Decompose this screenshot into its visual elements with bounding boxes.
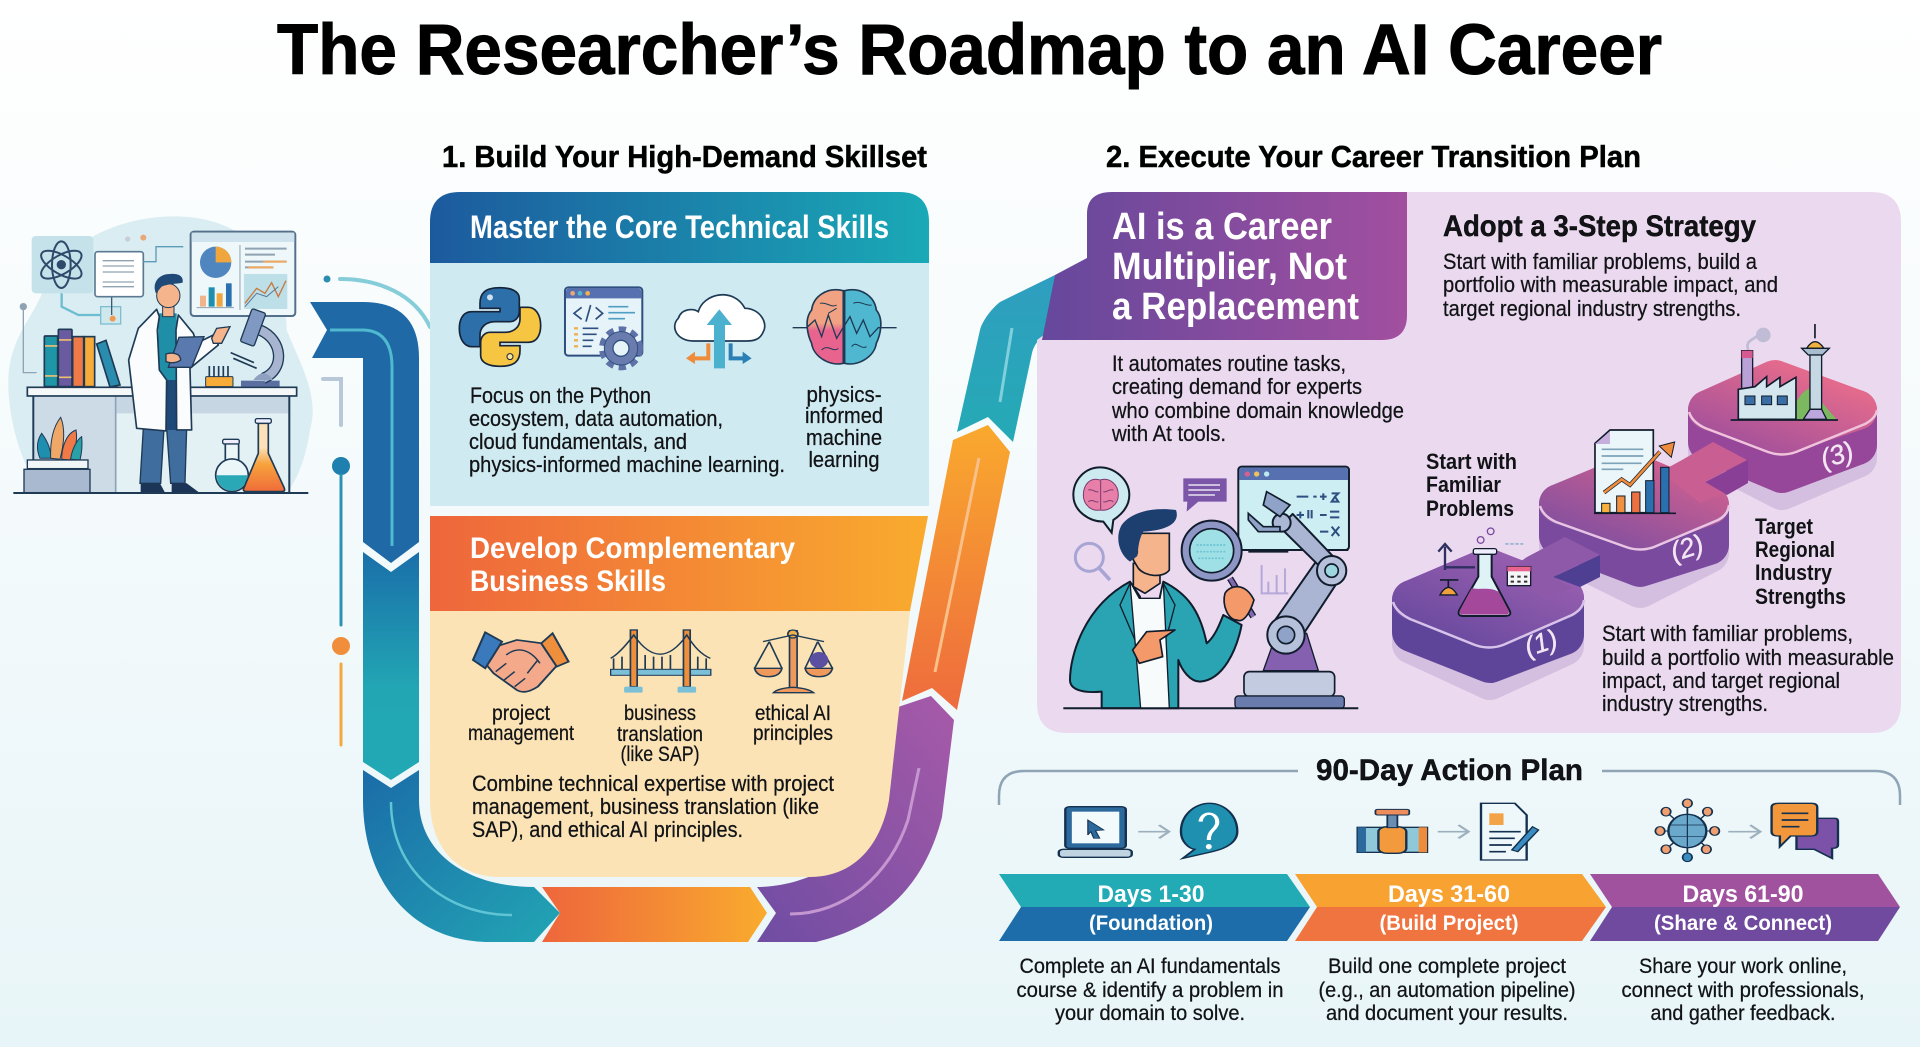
body text: cloud fundamentals, and bbox=[469, 429, 687, 454]
phase: days 31-60: Days 31-60 bbox=[1388, 881, 1510, 908]
body text: management, business translation (like bbox=[472, 794, 819, 819]
illustration: expert with magnifier and robot arm bbox=[1063, 467, 1358, 708]
connector 2 to 3 bbox=[1660, 442, 1748, 503]
phase text: share and connect: connect with professionals, bbox=[1622, 979, 1864, 1002]
heading: section 1: 1. Build Your High-Demand Skillset bbox=[442, 139, 927, 174]
title: The Researcher’s Roadmap to an AI Career bbox=[277, 11, 1662, 90]
side label: physics- bbox=[806, 382, 882, 407]
body text: Focus on the Python bbox=[470, 383, 651, 408]
icon labels: project bbox=[492, 702, 550, 725]
body text bbox=[469, 383, 785, 477]
multiplier text bbox=[1111, 351, 1404, 446]
label: start with familiar problems: Start with bbox=[1426, 449, 1517, 474]
icons on platforms bbox=[1438, 324, 1838, 616]
icon labels: management bbox=[468, 722, 574, 745]
label: target regional industry strengths: Strengths bbox=[1755, 584, 1846, 609]
phase text: share and connect: and gather feedback. bbox=[1650, 1002, 1836, 1025]
platform 3 bbox=[1689, 380, 1877, 474]
bottom strategy text: impact, and target regional bbox=[1602, 668, 1840, 693]
phase: days 31-60 bbox=[1295, 874, 1606, 941]
phase: days 1-30: Days 1-30 bbox=[1098, 881, 1204, 908]
phase: days 1-30: (Foundation) bbox=[1089, 912, 1213, 935]
phase: days 1-30 bbox=[999, 874, 1310, 941]
strategy text bbox=[1443, 249, 1778, 321]
platform 2: (2) bbox=[1667, 529, 1707, 567]
section: 90-day action plan bbox=[999, 754, 1900, 1025]
label: start with familiar problems: Problems bbox=[1426, 496, 1514, 521]
phase text: build project: Build one complete project bbox=[1328, 955, 1566, 978]
bottom strategy text: industry strengths. bbox=[1602, 691, 1768, 716]
ribbon arrow: left and bottom path bbox=[310, 302, 954, 942]
phase text: foundation: your domain to solve. bbox=[1055, 1002, 1245, 1025]
icon labels: principles bbox=[753, 722, 833, 745]
header text bbox=[470, 532, 795, 598]
multiplier text: It automates routine tasks, bbox=[1112, 351, 1346, 376]
phase: days 61-90: Days 61-90 bbox=[1682, 881, 1804, 908]
strategy text: portfolio with measurable impact, and bbox=[1443, 272, 1778, 297]
icon labels: (like SAP) bbox=[620, 743, 700, 766]
panel: complementary business skills bbox=[430, 516, 928, 877]
panel header bbox=[430, 516, 928, 611]
side label: machine bbox=[806, 425, 882, 450]
phase text: share and connect: Share your work online, bbox=[1639, 955, 1847, 978]
header text: Business Skills bbox=[470, 565, 666, 598]
body text: SAP), and ethical AI principles. bbox=[472, 817, 743, 842]
illustration: researcher at lab desk bbox=[8, 216, 313, 493]
strategy text: Start with familiar problems, build a bbox=[1443, 249, 1758, 274]
bottom strategy text bbox=[1602, 621, 1894, 716]
label: start with familiar problems: Familiar bbox=[1426, 472, 1501, 497]
banner text: AI is a Career bbox=[1112, 206, 1332, 248]
label: start with familiar problems bbox=[1426, 449, 1517, 521]
body text: ecosystem, data automation, bbox=[469, 406, 723, 431]
phase text: build project: and document your results. bbox=[1326, 1002, 1568, 1025]
ribbon arrow: rising path bbox=[902, 275, 1060, 710]
phase text: build project: (e.g., an automation pipeline) bbox=[1318, 979, 1576, 1002]
label: target regional industry strengths: Industry bbox=[1755, 560, 1833, 585]
icon labels: business bbox=[624, 702, 696, 725]
bottom strategy text: Start with familiar problems, bbox=[1602, 621, 1853, 646]
phase text: foundation: course & identify a problem in bbox=[1016, 979, 1284, 1002]
phase text: build project bbox=[1318, 955, 1576, 1025]
icon labels: translation bbox=[617, 723, 703, 746]
label: target regional industry strengths bbox=[1755, 514, 1846, 609]
icon labels: ethical AI bbox=[755, 702, 831, 725]
connector 1 to 2 bbox=[1505, 537, 1600, 600]
stepped platforms diagram bbox=[1393, 380, 1877, 680]
body text: physics-informed machine learning. bbox=[469, 452, 785, 477]
body text bbox=[472, 771, 834, 842]
phase text: foundation: Complete an AI fundamentals bbox=[1020, 955, 1280, 978]
phase: days 61-90 bbox=[1590, 874, 1900, 941]
plan heading: 90-Day Action Plan bbox=[1316, 754, 1583, 787]
icons row bbox=[473, 630, 832, 693]
banner text bbox=[1112, 206, 1359, 328]
platform 2 bbox=[1540, 473, 1729, 567]
bottom strategy text: build a portfolio with measurable bbox=[1602, 645, 1894, 670]
phase text: share and connect bbox=[1622, 955, 1864, 1025]
side label bbox=[805, 382, 883, 472]
platform 1: (1) bbox=[1521, 624, 1561, 662]
banner text: a Replacement bbox=[1112, 286, 1359, 328]
panel header bbox=[430, 192, 929, 263]
panel: core technical skills bbox=[430, 192, 929, 506]
phase: days 31-60: (Build Project) bbox=[1380, 912, 1518, 935]
banner text: Multiplier, Not bbox=[1112, 246, 1347, 288]
heading: section 2: 2. Execute Your Career Transition Plan bbox=[1106, 139, 1641, 174]
side label: informed bbox=[805, 403, 883, 428]
header text: Develop Complementary bbox=[470, 532, 795, 565]
multiplier text: creating demand for experts bbox=[1112, 374, 1362, 399]
connector: blue and orange timeline bbox=[323, 276, 430, 745]
strategy heading: Adopt a 3-Step Strategy bbox=[1443, 210, 1756, 243]
label: target regional industry strengths: Regional bbox=[1755, 537, 1835, 562]
panel: career multiplier and strategy bbox=[1037, 192, 1901, 733]
icons row bbox=[459, 287, 897, 368]
header text: Master the Core Technical Skills bbox=[470, 209, 889, 245]
multiplier text: who combine domain knowledge bbox=[1111, 398, 1404, 423]
phase: days 61-90: (Share & Connect) bbox=[1654, 912, 1832, 935]
label: target regional industry strengths: Target bbox=[1755, 514, 1814, 539]
platform 1 bbox=[1393, 568, 1584, 663]
body text: Combine technical expertise with project bbox=[472, 771, 834, 796]
side label: learning bbox=[808, 447, 880, 472]
icon labels bbox=[468, 702, 833, 766]
plan icons bbox=[1059, 799, 1838, 862]
strategy text: target regional industry strengths. bbox=[1443, 296, 1741, 321]
callout banner bbox=[1042, 192, 1407, 340]
platform 3: (3) bbox=[1817, 436, 1857, 474]
phase text: foundation bbox=[1016, 955, 1284, 1025]
multiplier text: with At tools. bbox=[1111, 421, 1226, 446]
